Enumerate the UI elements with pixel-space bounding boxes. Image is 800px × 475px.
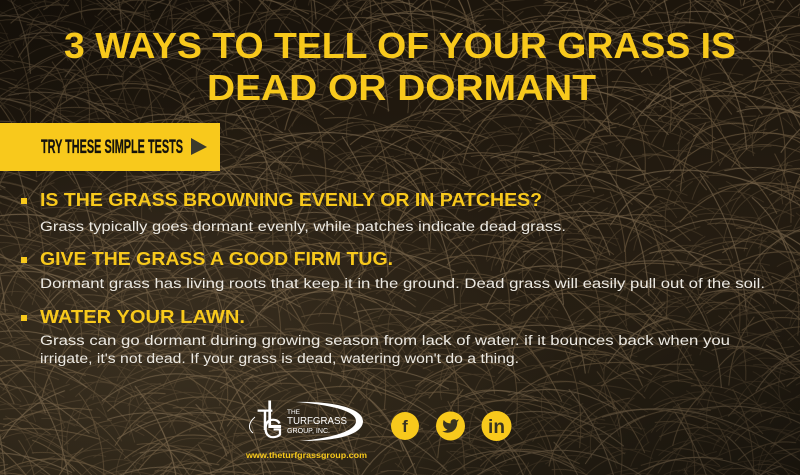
tip 3: water lawn: WATER YOUR LAWN. [40,306,245,327]
logo: The Turfgrass Group: GROUP, INC. [287,428,330,435]
title [64,25,736,108]
tip 3: water lawn: irrigate, it's not dead. If your grass is dead, watering won't do a thing. [40,351,519,366]
icon: play arrow [191,138,207,155]
logo: The Turfgrass Group: T [257,404,273,437]
tip 1: browning: IS THE GRASS BROWNING EVENLY OR IN PATCHES? [40,189,542,210]
icon: facebook [391,412,419,440]
icon: twitter [436,412,465,440]
tip 1: browning [21,189,566,234]
logo: The Turfgrass Group: THE [287,409,301,416]
tip 3: water lawn [21,306,730,366]
icon: linkedin: in [488,417,505,438]
icon: facebook: f [402,417,408,436]
tip 2: firm tug: GIVE THE GRASS A GOOD FIRM TUG. [40,248,393,269]
banner: try these simple tests [0,123,220,171]
website url: www.theturfgrassgroup.com [245,451,367,460]
logo: The Turfgrass Group: G [263,413,283,444]
tip 2: firm tug [21,248,765,291]
title: 3 WAYS TO TELL OF YOUR GRASS IS [64,25,736,66]
tip 1: browning: Grass typically goes dormant evenly, while patches indicate dead grass. [40,219,566,234]
banner: try these simple tests: TRY THESE SIMPLE TESTS [41,137,183,158]
icon: linkedin [482,411,512,441]
tip 2: firm tug: Dormant grass has living roots that keep it in the ground. Dead grass will easily pull out of the soil. [40,276,765,291]
logo: The Turfgrass Group: L [266,393,282,437]
logo: The Turfgrass Group: TURFGRASS [287,416,347,427]
title: DEAD OR DORMANT [207,67,596,108]
logo: The Turfgrass Group [249,393,363,444]
tip 3: water lawn: Grass can go dormant during growing season from lack of water. if it bounces back when you [40,333,730,348]
